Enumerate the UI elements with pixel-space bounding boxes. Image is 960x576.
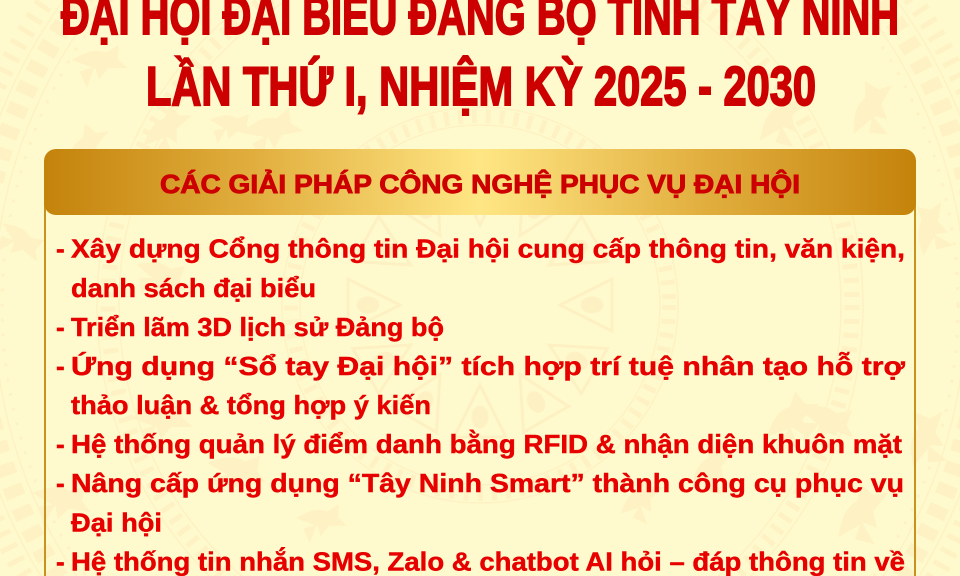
solutions list: -	[56, 234, 65, 264]
solutions list: thảo luận & tổng hợp ý kiến	[71, 390, 431, 420]
solutions list: -	[56, 429, 65, 459]
solutions list: danh sách đại biểu	[71, 273, 316, 303]
solutions list: -	[56, 546, 65, 576]
title	[61, 0, 899, 117]
panel: technology solutions	[44, 149, 916, 576]
solutions list: Hệ thống tin nhắn SMS, Zalo & chatbot AI hỏi – đáp thông tin về	[71, 546, 905, 576]
panel header	[44, 149, 916, 215]
solutions list	[56, 234, 906, 576]
panel header: CÁC GIẢI PHÁP CÔNG NGHỆ PHỤC VỤ ĐẠI HỘI	[160, 169, 800, 199]
solutions list: -	[56, 312, 65, 342]
solutions list: Triển lãm 3D lịch sử Đảng bộ	[71, 312, 444, 342]
solutions list: -	[56, 351, 65, 381]
solutions list: Nâng cấp ứng dụng “Tây Ninh Smart” thành công cụ phục vụ	[71, 468, 904, 498]
solutions list: Ứng dụng “Sổ tay Đại hội” tích hợp trí tuệ nhân tạo hỗ trợ	[71, 351, 906, 381]
solutions list: Hệ thống quản lý điểm danh bằng RFID & nhận diện khuôn mặt	[71, 429, 902, 459]
solutions list: Đại hội	[71, 508, 162, 538]
panel border	[45, 190, 915, 576]
solutions list: Xây dựng Cổng thông tin Đại hội cung cấp thông tin, văn kiện,	[71, 234, 905, 264]
solutions list: -	[56, 468, 65, 498]
